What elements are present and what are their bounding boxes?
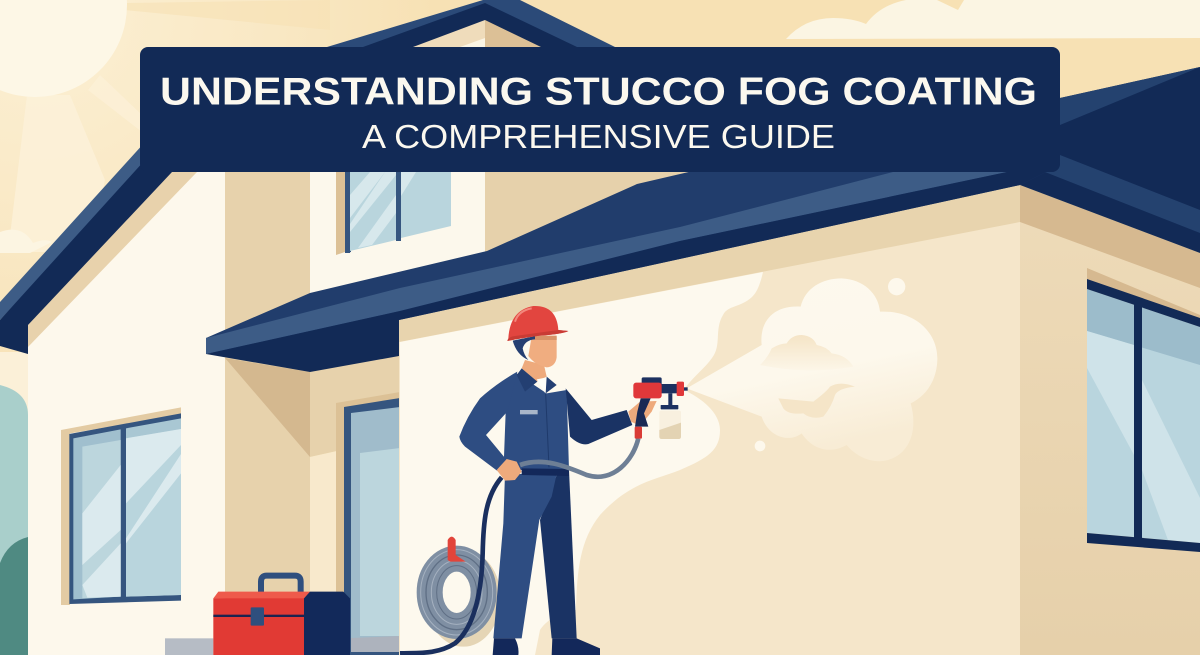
dark hose <box>400 477 502 653</box>
tree at left edge <box>0 352 28 655</box>
lower left window <box>61 407 181 605</box>
grey hose <box>520 438 638 477</box>
toolbox <box>165 576 350 655</box>
upper wall: left cream and beige columns <box>28 165 720 655</box>
icon: paint cup <box>659 411 681 439</box>
right window <box>1087 268 1200 552</box>
sun with rays <box>0 0 330 252</box>
left gable roof <box>0 142 172 354</box>
icon: coiled hose <box>421 537 494 640</box>
torso <box>504 373 569 470</box>
cloud: small left <box>0 230 52 253</box>
head <box>528 337 557 367</box>
neck <box>522 360 547 382</box>
right wing wall <box>1020 185 1200 655</box>
lower roof <box>206 165 1060 372</box>
fogged wall area <box>400 272 763 655</box>
upper gable roof <box>327 0 615 47</box>
upper window <box>336 165 451 255</box>
right wing roof <box>1020 67 1200 253</box>
left hand <box>497 459 522 481</box>
right arm <box>566 388 632 444</box>
inner fog swirl <box>778 384 855 418</box>
belt <box>522 468 569 476</box>
title banner <box>140 47 1060 172</box>
title: UNDERSTANDING STUCCO FOG COATING <box>160 70 1037 114</box>
left arm <box>459 372 517 472</box>
icon: spray gun <box>633 377 688 439</box>
name tag <box>520 410 538 414</box>
main wall with trim <box>399 185 1020 655</box>
porch recess and door <box>225 355 400 655</box>
worker spraying fog coat <box>400 306 688 655</box>
right hand <box>628 401 657 424</box>
collar and shirt <box>517 368 557 393</box>
hair <box>513 336 536 360</box>
subtitle: A COMPREHENSIVE GUIDE <box>362 118 835 155</box>
inner fog puff <box>760 335 853 370</box>
hard hat <box>507 306 568 341</box>
small fog droplets <box>755 278 905 451</box>
fog cloud <box>687 278 937 461</box>
cloud: top right <box>786 0 1200 39</box>
trouser legs <box>493 470 600 655</box>
